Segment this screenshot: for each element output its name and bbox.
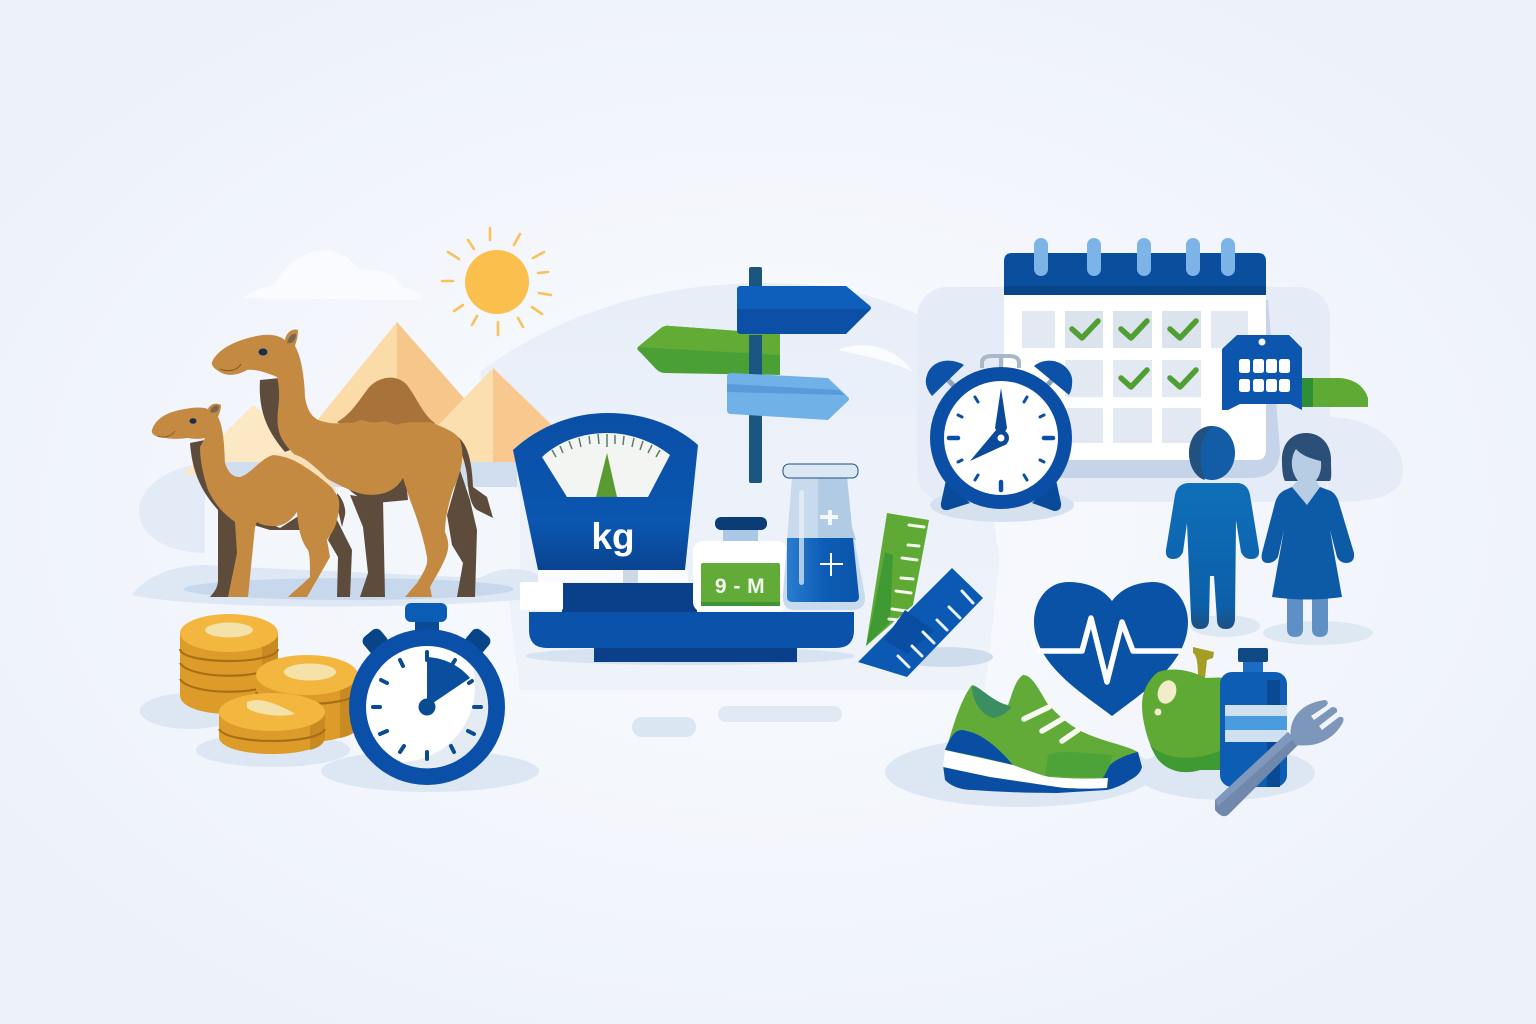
weight label: 9 - M <box>715 575 765 598</box>
man figure <box>1166 426 1259 629</box>
calendar rings <box>1034 238 1235 276</box>
scale unit label: kg <box>591 516 635 557</box>
scale base <box>520 582 854 662</box>
running shoe <box>943 675 1142 793</box>
stopwatch wedge <box>427 657 470 707</box>
large camel far legs <box>350 470 477 597</box>
fork <box>1215 700 1344 816</box>
people shadows <box>1190 615 1373 645</box>
flask liquid <box>787 538 859 602</box>
blue ruler <box>858 568 983 677</box>
apple <box>1142 647 1222 772</box>
alarm clock shadow <box>930 488 1074 522</box>
stopwatch <box>349 603 505 785</box>
alarm handle <box>982 356 1019 368</box>
alarm legs <box>941 480 1061 511</box>
shoe toe shade <box>1045 752 1113 778</box>
woman legs <box>1287 595 1328 637</box>
calendar <box>1004 238 1266 460</box>
stopwatch side buttons <box>360 626 493 656</box>
water bottle <box>1220 648 1287 787</box>
small camel <box>152 404 352 597</box>
calendar header <box>1004 253 1266 295</box>
scale shadow <box>525 647 855 665</box>
pulse line <box>1040 618 1181 682</box>
cloud <box>244 250 422 300</box>
alarm bells <box>926 361 1072 396</box>
scale dial <box>542 433 670 497</box>
coin shadows <box>140 693 350 767</box>
coin emblem <box>247 700 295 716</box>
small camel far leg <box>328 493 352 597</box>
ground shadow: camels <box>132 565 550 607</box>
scale body <box>513 413 698 570</box>
coin emblem <box>205 622 253 638</box>
calendar cells <box>1022 311 1248 443</box>
sign: green left <box>637 326 780 380</box>
shoe laces <box>1024 707 1078 741</box>
alarm connectors <box>948 380 1052 388</box>
coins stack: front <box>219 693 325 754</box>
badge grid <box>1239 359 1290 392</box>
food shadow <box>1135 746 1315 800</box>
stopwatch ticks <box>373 652 481 759</box>
small camel eye <box>190 418 196 424</box>
sign: blue top right <box>737 286 871 334</box>
woman face <box>1292 449 1321 483</box>
scale needle <box>596 453 617 497</box>
green ruler ticks <box>889 525 924 620</box>
small calendar badge <box>1222 335 1302 410</box>
small camel body <box>152 404 339 597</box>
backdrop: center hill <box>480 283 1000 690</box>
stopwatch crown <box>405 603 447 632</box>
shoe heel <box>945 730 1013 765</box>
sun <box>442 228 551 335</box>
shoe collar <box>972 686 1012 718</box>
calendar shadow <box>1010 300 1280 478</box>
large camel hump <box>337 378 435 430</box>
shoe midsole stripe <box>943 750 1108 789</box>
large camel neck shadow and belly <box>260 378 408 503</box>
shoe upper <box>947 675 1138 780</box>
large camel body <box>212 330 462 597</box>
woman figure <box>1262 433 1354 637</box>
apple highlight <box>1154 678 1180 716</box>
shoe shadow <box>885 737 1155 807</box>
alarm ticks <box>949 397 1053 490</box>
alarm clock <box>926 356 1072 511</box>
woman dress <box>1262 487 1354 600</box>
backdrop: calendar blob <box>917 287 1403 502</box>
coins stack: back left <box>180 614 278 714</box>
large camel tail <box>458 437 493 518</box>
blue ruler ticks <box>898 591 973 667</box>
green ruler <box>866 513 929 646</box>
large camel <box>212 330 493 597</box>
large camel ear <box>287 334 296 343</box>
flask <box>783 464 865 610</box>
pyramids <box>183 322 590 475</box>
shoe sole <box>943 752 1142 793</box>
small camel back highlight <box>273 453 338 493</box>
large camel eye <box>258 348 268 356</box>
alarm hands <box>970 388 1009 461</box>
backdrop: left blob <box>139 463 520 577</box>
bottle label stripes <box>1225 705 1287 742</box>
calendar page <box>1004 295 1266 460</box>
small camel dark side <box>190 440 305 597</box>
scale stem <box>538 570 688 583</box>
calendar check marks <box>1072 321 1196 387</box>
large camel mouth <box>220 364 241 371</box>
signpost <box>637 267 871 483</box>
white swoosh <box>838 345 913 372</box>
coins stack: right <box>256 655 358 742</box>
scale dial ticks <box>552 434 660 457</box>
sand band <box>207 462 517 487</box>
kitchen scale <box>513 413 854 662</box>
small camel mouth <box>158 431 175 437</box>
decorative pills <box>632 706 842 737</box>
small green tab <box>1302 378 1368 407</box>
ruler shadow <box>897 647 993 667</box>
small camel ear <box>210 405 219 413</box>
coin emblem <box>284 664 336 680</box>
weight knob <box>715 517 767 543</box>
flask plus marks <box>820 510 843 576</box>
weight <box>693 517 787 612</box>
stopwatch shadow <box>321 750 539 792</box>
heart with pulse <box>1034 582 1188 716</box>
apple stem <box>1193 647 1214 678</box>
sign: light blue right <box>727 373 849 420</box>
signpost pole <box>749 267 762 483</box>
woman hair <box>1282 433 1331 481</box>
